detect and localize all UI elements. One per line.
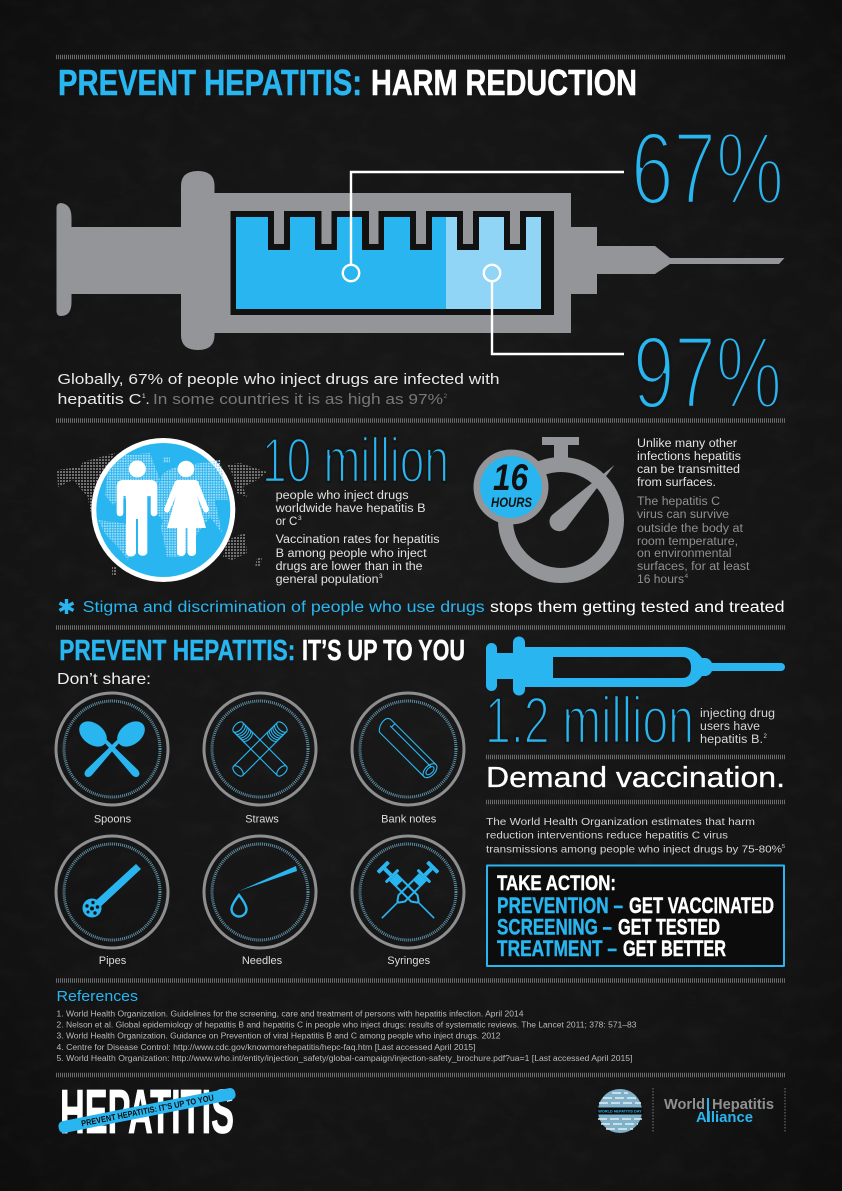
16 hours badge — [474, 450, 548, 524]
text: 10 million details: worldwide have hepatitis B — [274, 503, 426, 515]
text: surfaces: on environmental — [637, 548, 732, 560]
text: surfaces: infections hepatitis — [637, 451, 741, 463]
references list: 1. World Health Organization. Guidelines for the screening, care and treatment of persons with hepatitis infection. April 2014 — [56, 1010, 524, 1019]
icon: syringes — [352, 836, 464, 948]
logo: world hepatitis alliance — [664, 1097, 774, 1126]
text: 10 million details: 3 — [298, 515, 302, 522]
logo: hepatitis campaign: HEPATITIS — [60, 1078, 234, 1147]
text: demand vaccination: Demand vaccination. — [486, 762, 785, 794]
text: 10 million details: drugs are lower than in the — [276, 561, 423, 573]
label: syringes: Syringes — [387, 955, 431, 967]
icon: straws — [204, 693, 316, 805]
stat 97%: 97% — [633, 315, 782, 430]
text: surfaces: outside the body at — [637, 523, 744, 535]
text: injecting drug users: injecting drug — [700, 708, 775, 720]
text: 10 million details: Vaccination rates for hepatitis — [276, 534, 440, 546]
logo band: PREVENT HEPATITIS: IT’S UP TO YOU — [80, 1092, 215, 1128]
watch pointer — [550, 465, 614, 531]
intro text: 2 — [444, 393, 448, 400]
intro text: hepatitis C — [58, 391, 142, 408]
dotted world map — [57, 453, 267, 576]
panel: take action: PREVENTION – — [497, 893, 623, 918]
large syringe chart — [56, 171, 784, 354]
panel: take action: TAKE ACTION: — [497, 872, 616, 895]
logo: world hepatitis day — [597, 1089, 643, 1133]
text: surfaces: from surfaces. — [637, 477, 716, 489]
text: 10 million details: general population — [276, 574, 379, 586]
stat 10 million: 10 million — [262, 426, 449, 496]
stigma statement: Stigma and discrimination of people who use drugs — [83, 599, 485, 616]
text: injecting drug users: users have — [700, 721, 760, 733]
intro text — [58, 371, 500, 408]
text: injecting drug users: hepatitis B. — [700, 734, 763, 746]
text: surfaces — [637, 438, 750, 586]
text: 10 million details — [274, 490, 440, 586]
icon: blue syringe — [486, 636, 785, 696]
label: needles: Needles — [242, 955, 283, 967]
text: surfaces: 16 hours — [637, 574, 684, 586]
text: 10 million details: or C — [276, 516, 297, 528]
stat 1.2 million: 1.2 million — [485, 683, 694, 757]
text: injecting drug users: 2 — [764, 734, 768, 740]
intro text: 1 — [142, 393, 146, 400]
logo: world hepatitis alliance: Hepatitis — [712, 1097, 774, 1113]
globe — [91, 438, 235, 582]
text: 10 million details: people who inject drugs — [276, 490, 409, 502]
heading: up to you: PREVENT HEPATITIS: — [59, 635, 295, 667]
title: HARM REDUCTION — [371, 62, 637, 103]
references list — [56, 1010, 637, 1063]
text: surfaces: virus can survive — [637, 509, 729, 521]
text: WHO estimate: The World Health Organization estimates that harm — [486, 816, 755, 828]
text: 10 million details: B among people who inject — [276, 548, 427, 560]
title — [58, 62, 637, 103]
watch ring — [506, 464, 616, 576]
fluid 67% — [236, 217, 446, 309]
woman figure — [164, 461, 209, 556]
icon: needles — [204, 836, 316, 948]
label: pipes: Pipes — [99, 955, 127, 967]
text: don't share: Don’t share: — [57, 671, 151, 688]
man figure — [117, 460, 157, 557]
text: WHO estimate: 5 — [782, 844, 785, 850]
stopwatch icon — [474, 437, 616, 576]
references list: 3. World Health Organization. Guidance on Prevention of viral Hepatitis B and C among people who inject drugs. 2012 — [56, 1032, 501, 1040]
text: 10 million details: 3 — [379, 573, 383, 580]
icon: bank notes — [352, 693, 464, 805]
panel: take action — [487, 866, 784, 966]
syringe chamber — [230, 211, 554, 315]
intro text: . — [146, 391, 150, 408]
intro text: In some countries it is as high as 97% — [153, 391, 443, 408]
plunger teeth — [268, 211, 526, 250]
logo: world hepatitis alliance: World — [664, 1097, 705, 1113]
stat 67%: 67% — [631, 111, 784, 226]
text: injecting drug users — [700, 708, 775, 746]
panel: take action: TREATMENT – — [497, 936, 617, 961]
stigma statement — [60, 599, 784, 616]
heading: references: References — [56, 988, 138, 1005]
text: surfaces: surfaces, for at least — [637, 561, 750, 573]
syringe body — [56, 171, 784, 350]
references list: 2. Nelson et al. Global epidemiology of hepatitis B and hepatitis C in people who inject drugs: results of systematic reviews. The Lancet 2011; 378: 571–83 — [56, 1020, 637, 1030]
panel: take action: GET TESTED — [618, 914, 720, 940]
text: WHO estimate — [486, 816, 785, 856]
logo: world hepatitis day: WORLD HEPATITIS DAY — [598, 1110, 642, 1114]
text: WHO estimate: reduction interventions reduce hepatitis C virus — [486, 830, 728, 842]
references list: 5. World Health Organization: http://www.who.int/entity/injection_safety/global-campaign/injection-safety_brochure.pdf?ua=1 [Last accessed April 2015] — [56, 1054, 632, 1063]
text: surfaces: Unlike many other — [637, 438, 737, 450]
stigma statement: stops them getting tested and treated — [490, 599, 784, 616]
logo: world hepatitis alliance: Alliance — [696, 1109, 753, 1126]
intro text: Globally, 67% of people who inject drugs are infected with — [58, 371, 500, 388]
heading: up to you: IT’S UP TO YOU — [302, 635, 465, 667]
text: surfaces: room temperature, — [637, 536, 738, 548]
icon: pipes — [56, 836, 168, 948]
panel: take action: GET BETTER — [623, 936, 726, 961]
references list: 4. Centre for Disease Control: http://www.cdc.gov/knowmorehepatitis/hepc-faq.htm [Last accessed April 2015] — [56, 1043, 476, 1052]
label: spoons: Spoons — [94, 814, 132, 826]
text: surfaces: can be transmitted — [637, 464, 740, 476]
text: WHO estimate: transmissions among people who inject drugs by 75-80% — [486, 844, 782, 856]
label: bank notes: Bank notes — [381, 814, 437, 826]
label: straws: Straws — [245, 814, 279, 826]
icon: asterisk — [60, 599, 74, 614]
world map and people icon — [57, 438, 267, 582]
fluid 97% — [446, 217, 541, 309]
logo: hepatitis campaign — [58, 1078, 236, 1147]
text: surfaces: 4 — [684, 573, 688, 580]
callout line 67% — [343, 172, 624, 281]
16 hours badge: 16 — [493, 457, 528, 498]
icon: spoons — [56, 693, 168, 805]
watch crown — [542, 437, 579, 460]
callout line 97% — [484, 265, 624, 354]
panel: take action: SCREENING – — [497, 914, 612, 940]
text: surfaces: The hepatitis C — [637, 496, 720, 508]
title: PREVENT HEPATITIS: — [58, 62, 362, 103]
16 hours badge: HOURS — [491, 494, 533, 510]
panel: take action: GET VACCINATED — [629, 893, 774, 918]
